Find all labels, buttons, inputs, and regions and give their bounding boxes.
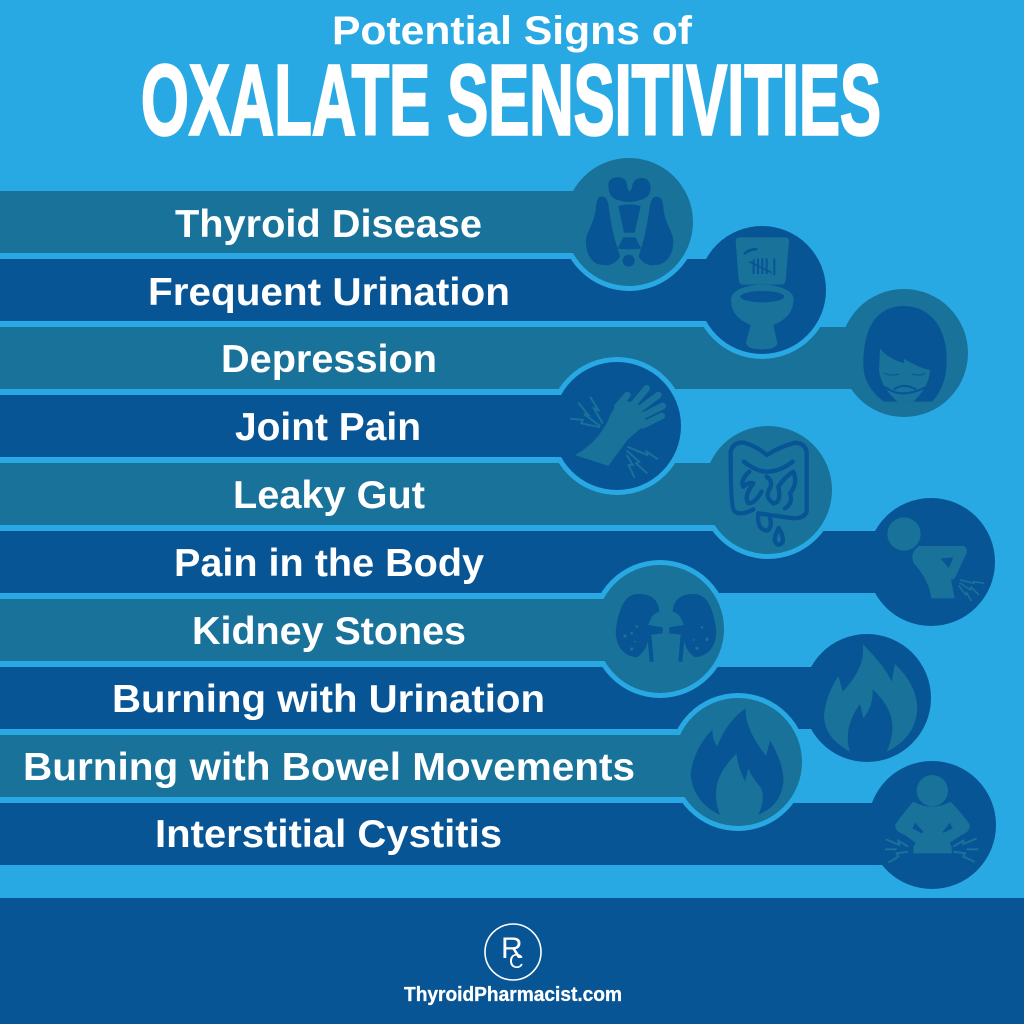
logo: RC monogram: R <box>501 932 523 965</box>
row: Interstitial Cystitis <box>0 756 1001 894</box>
icon: toilet with tally marks <box>731 237 794 349</box>
label: Pain in the Body <box>174 542 484 585</box>
row: Burning with Bowel Movements <box>0 693 807 831</box>
row: Leaky Gut <box>0 421 837 559</box>
label: Thyroid Disease <box>175 203 482 246</box>
site name: ThyroidPharmacist.com <box>404 984 622 1006</box>
logo: RC monogram <box>485 924 541 980</box>
label: Burning with Bowel Movements <box>23 746 635 789</box>
title <box>141 9 881 156</box>
label: Joint Pain <box>235 406 421 449</box>
row: Pain in the Body <box>0 493 1000 631</box>
label: Kidney Stones <box>192 610 466 653</box>
icon: sad woman <box>863 306 947 402</box>
label: Interstitial Cystitis <box>155 813 502 856</box>
icon: flame <box>824 644 917 752</box>
icon: flame <box>691 708 783 815</box>
row: Kidney Stones <box>0 560 729 698</box>
label: Frequent Urination <box>148 271 510 314</box>
icon: intestines with drop <box>731 443 807 545</box>
row: Burning with Urination <box>0 629 936 767</box>
label: Burning with Urination <box>112 678 545 721</box>
row: Depression <box>0 284 973 422</box>
icon: thyroid gland <box>586 177 673 267</box>
label: Leaky Gut <box>233 474 425 517</box>
label: Depression <box>221 338 437 381</box>
row: Thyroid Disease <box>0 153 698 291</box>
title: Potential Signs of <box>332 9 693 53</box>
icon: painful hand <box>570 388 663 478</box>
icon: person with abdominal pain <box>885 775 978 863</box>
footer band <box>0 898 1024 1024</box>
logo: RC monogram: C <box>509 951 523 973</box>
footer logo and site name <box>404 924 622 1006</box>
row: Frequent Urination <box>0 221 831 359</box>
row: Joint Pain <box>0 357 686 495</box>
icon: kidneys <box>616 594 716 662</box>
icon: person with back pain <box>887 517 984 601</box>
